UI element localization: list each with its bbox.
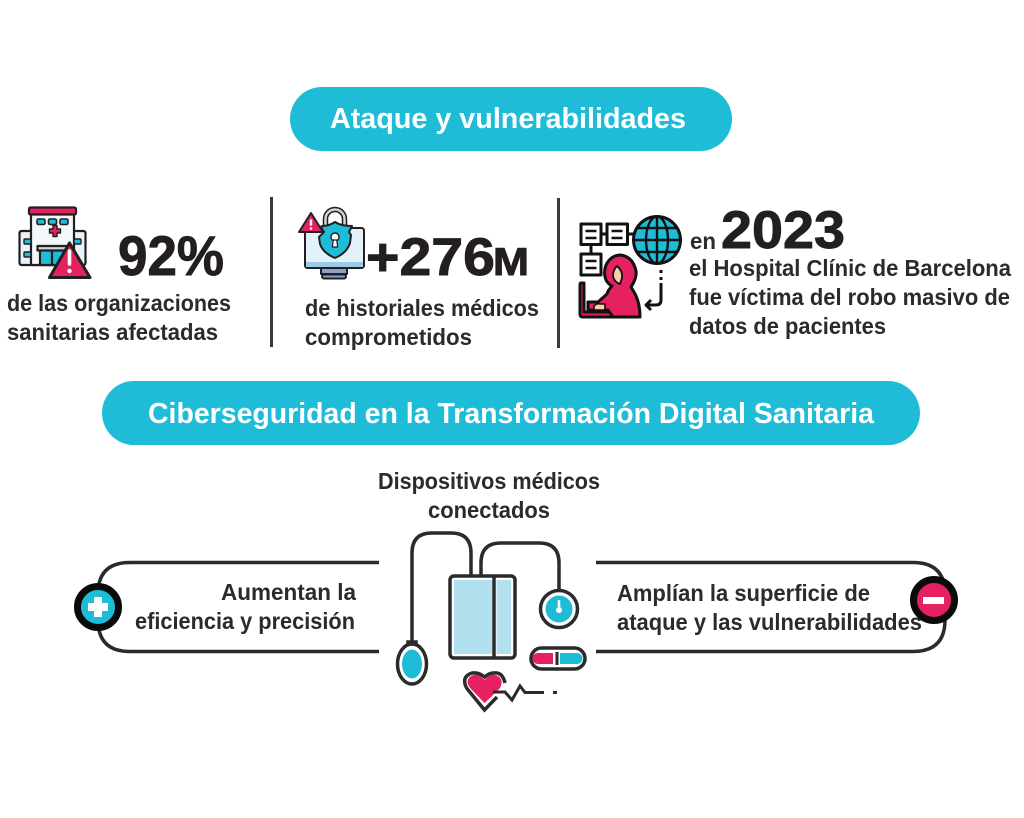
bracket: left: [98, 562, 379, 652]
bracket: right: [596, 562, 945, 652]
text: Aumentan la eficiencia y precisión: eficiencia y precisión: [135, 608, 355, 634]
panel: riesgos: [596, 562, 954, 652]
text: Dispositivos médicos conectados: Dispositivos médicos: [378, 468, 600, 494]
statistic: +276M: +276: [366, 228, 495, 287]
text: en 2023: en: [690, 228, 716, 254]
text: Hospital Clínic: [689, 255, 1011, 339]
text: Amplían la superficie de ataque: [617, 580, 922, 635]
panel: ventajas: [78, 562, 379, 652]
text: historiales comprometidos: de historiales médicos: [305, 295, 539, 321]
text: historiales comprometidos: [305, 295, 539, 350]
heading: Ataque y vulnerabilidades: [290, 87, 732, 151]
icon: medical device: [398, 533, 585, 710]
panel: 276M: [299, 210, 539, 350]
text: organizaciones afectadas: de las organizaciones: [7, 290, 231, 316]
statistic: 92%: 92%: [118, 224, 224, 287]
text: Amplían la superficie de ataque: ataque y las vulnerabilidades: [617, 609, 922, 635]
text: Dispositivos médicos conectados: conectados: [428, 497, 550, 523]
icon: hacker with network and globe: [580, 216, 680, 317]
text: organizaciones afectadas: [7, 290, 231, 345]
text: Aumentan la eficiencia y precisión: Aumentan la: [221, 579, 356, 605]
icon: monitor with broken lock: [299, 210, 364, 278]
icon: plus: [78, 586, 118, 628]
heading: Ciberseguridad en la Transformación Digital Sanitaria: Ciberseguridad en la Transformación Digital Sanitaria: [148, 398, 875, 430]
icon: minus: [914, 580, 954, 620]
text: Hospital Clínic: el Hospital Clínic de Barcelona: [689, 255, 1011, 281]
heading: Ciberseguridad en la Transformación Digital Sanitaria: [102, 381, 920, 445]
text: Amplían la superficie de ataque: Amplían la superficie de: [617, 580, 870, 606]
text: Aumentan la eficiencia y precisión: [135, 579, 356, 634]
heading: Ataque y vulnerabilidades: Ataque y vulnerabilidades: [330, 103, 686, 135]
icon: hospital with warning: [20, 208, 90, 278]
text: Dispositivos médicos conectados: [378, 468, 600, 523]
text: en 2023: 2023: [721, 201, 845, 260]
statistic: +276M: M: [493, 241, 529, 284]
panel: 92%: [7, 208, 231, 345]
panel: 2023: [580, 201, 1011, 339]
text: organizaciones afectadas: sanitarias afectadas: [7, 319, 218, 345]
text: Hospital Clínic: fue víctima del robo masivo de: [689, 284, 1010, 310]
text: Hospital Clínic: datos de pacientes: [689, 313, 886, 339]
text: historiales comprometidos: comprometidos: [305, 324, 472, 350]
